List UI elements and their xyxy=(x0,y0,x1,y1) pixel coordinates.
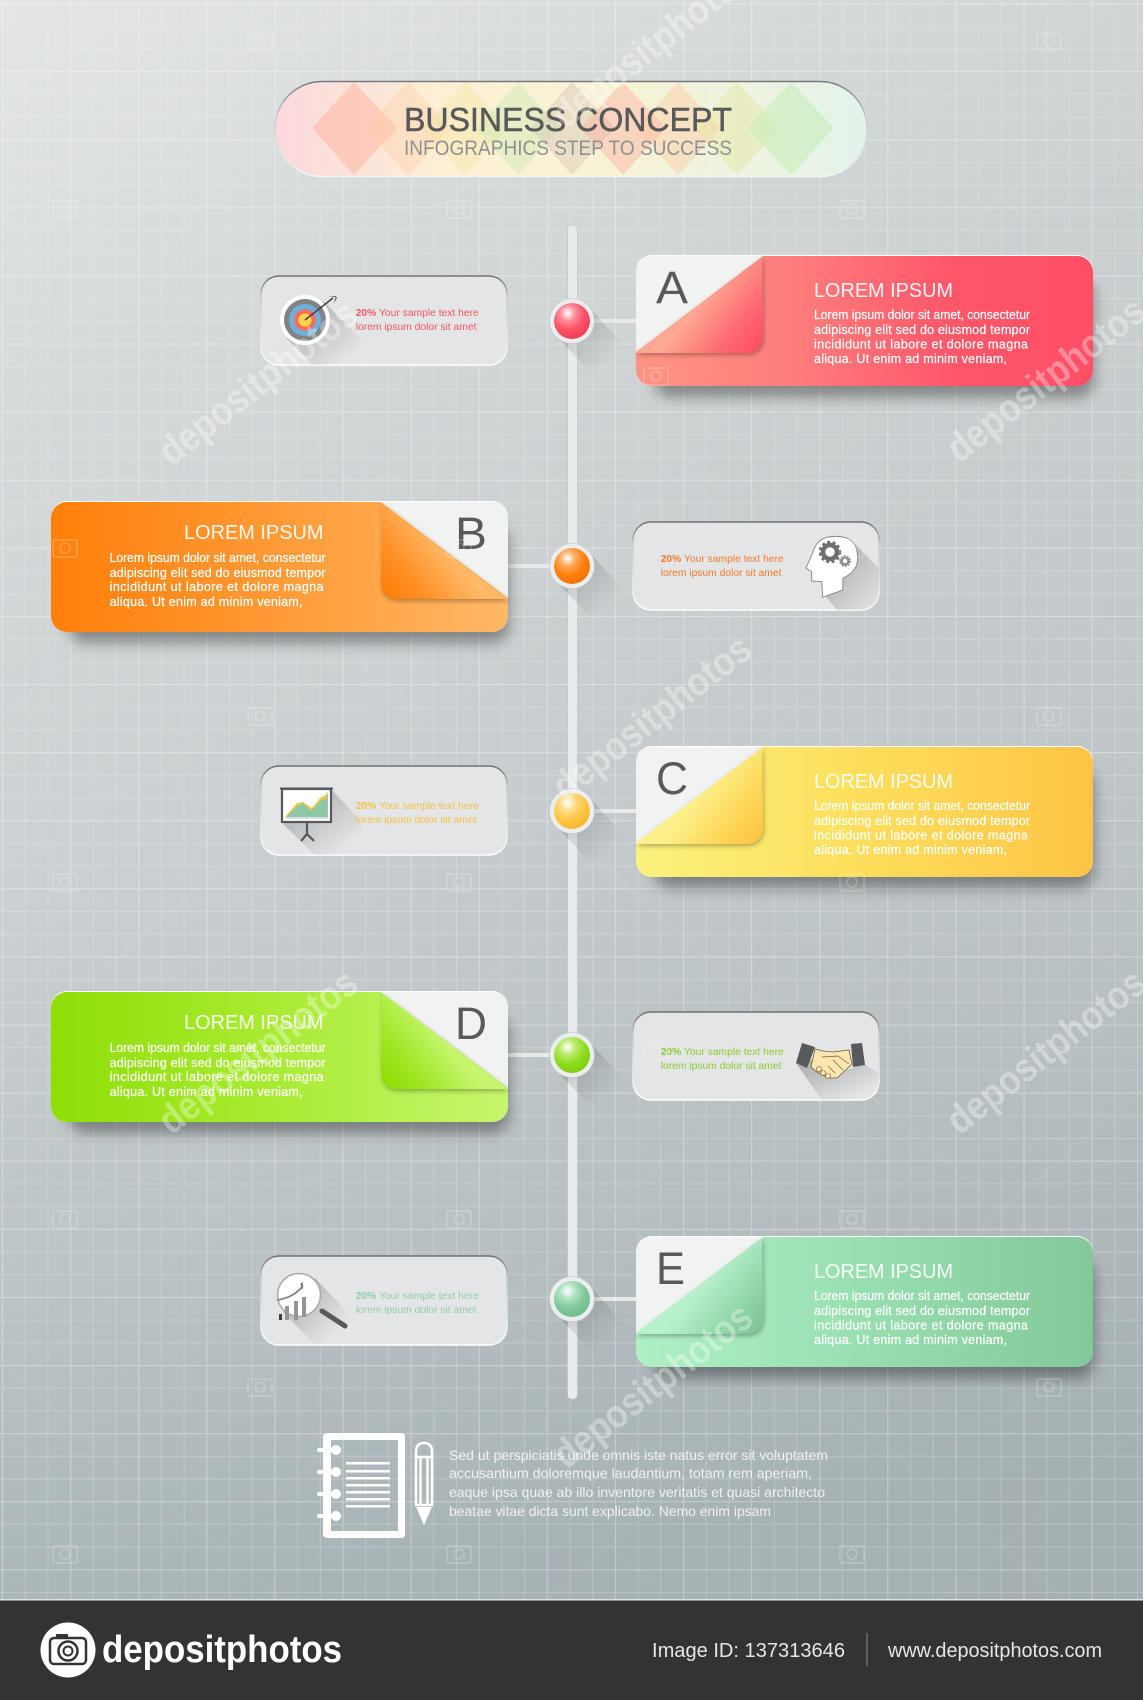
node D with connector xyxy=(507,1032,624,1108)
card body text xyxy=(110,1041,326,1099)
icon: magnifier with chart xyxy=(276,1272,348,1342)
footer note text: eaque ipsa quae ab illo inventore veritatis et quasi architecto xyxy=(449,1484,825,1500)
card heading: LOREM IPSUM xyxy=(184,522,324,544)
small box B: head: lorem ipsum dolor sit amet xyxy=(661,568,782,579)
icon: pencil xyxy=(416,1443,432,1525)
small box A: target xyxy=(261,276,507,372)
icon: handshake xyxy=(796,1043,879,1100)
card body text xyxy=(814,1289,1030,1347)
card body text xyxy=(814,308,1030,366)
small box D: handshake: lorem ipsum dolor sit amet xyxy=(661,1061,782,1072)
brand name: depositphotos xyxy=(102,1629,342,1671)
card body text xyxy=(814,799,1030,857)
card body text: adipiscing elit sed do eiusmod tempor xyxy=(110,566,326,580)
node B with connector xyxy=(507,544,624,619)
panel: card E xyxy=(636,1236,1094,1378)
card body text: adipiscing elit sed do eiusmod tempor xyxy=(814,323,1030,337)
title text: BUSINESS CONCEPT xyxy=(404,101,732,138)
small box E: magnifier xyxy=(261,1256,507,1350)
card body text: aliqua. Ut enim ad minim veniam, xyxy=(110,1085,303,1099)
watermarks: depositphotos xyxy=(150,292,366,474)
panel: card C xyxy=(636,746,1094,888)
watermarks: depositphotos xyxy=(544,627,760,809)
small box A: target: lorem ipsum dolor sit amet xyxy=(356,322,477,333)
letter C: C xyxy=(656,753,688,804)
icon: notebook xyxy=(317,1433,405,1538)
letter B: B xyxy=(455,508,487,559)
footer note text: Sed ut perspiciatis unde omnis iste natus error sit voluptatem xyxy=(449,1447,828,1463)
card body text: Lorem ipsum dolor sit amet, consectetur xyxy=(814,799,1030,813)
title banner xyxy=(275,82,867,176)
letter D: D xyxy=(455,998,487,1049)
panel: card A xyxy=(636,255,1094,397)
node C with connector xyxy=(550,788,636,864)
node E with connector xyxy=(550,1276,636,1352)
footer note text xyxy=(449,1447,828,1519)
card heading: LOREM IPSUM xyxy=(184,1012,324,1034)
card heading: LOREM IPSUM xyxy=(814,771,953,793)
caption text: 20% Your sample text here xyxy=(661,554,784,565)
small box E: magnifier: lorem ipsum dolor sit amet xyxy=(356,1305,477,1316)
card body text: aliqua. Ut enim ad minim veniam, xyxy=(814,1333,1007,1347)
card body text: incididunt ut labore et dolore magna xyxy=(814,828,1028,842)
footer note text: beatae vitae dicta sunt explicabo. Nemo enim ipsam xyxy=(449,1503,771,1519)
card body text: Lorem ipsum dolor sit amet, consectetur xyxy=(110,1041,326,1055)
icon: target with arrow xyxy=(280,295,358,365)
caption text: 20% Your sample text here xyxy=(356,308,479,319)
card body text: incididunt ut labore et dolore magna xyxy=(110,1070,324,1084)
letter A: A xyxy=(656,262,688,313)
card body text: incididunt ut labore et dolore magna xyxy=(110,580,324,594)
card body text: Lorem ipsum dolor sit amet, consectetur xyxy=(814,308,1030,322)
card body text: Lorem ipsum dolor sit amet, consectetur xyxy=(814,1289,1030,1303)
card body text: incididunt ut labore et dolore magna xyxy=(814,1318,1028,1332)
node A with connector xyxy=(550,298,636,374)
small box B: head xyxy=(632,521,880,611)
website url: www.depositphotos.com xyxy=(887,1640,1102,1662)
icon: presentation board xyxy=(280,788,360,855)
panel: card D xyxy=(51,991,509,1133)
card body text: adipiscing elit sed do eiusmod tempor xyxy=(814,1304,1030,1318)
card body text: aliqua. Ut enim ad minim veniam, xyxy=(110,595,303,609)
small box C: presentation xyxy=(261,766,507,860)
subtitle text: INFOGRAPHICS STEP TO SUCCESS xyxy=(404,137,732,160)
card body text: Lorem ipsum dolor sit amet, consectetur xyxy=(110,551,326,565)
card heading: LOREM IPSUM xyxy=(814,280,953,302)
caption text: 20% Your sample text here xyxy=(356,1291,479,1302)
image id: Image ID: 137313646 xyxy=(652,1640,845,1662)
icon: head with gears xyxy=(806,536,879,610)
caption text: 20% Your sample text here xyxy=(661,1047,784,1058)
panel: card B xyxy=(51,501,509,643)
watermarks xyxy=(150,0,1143,1477)
watermarks: depositphotos xyxy=(150,961,366,1143)
card body text: adipiscing elit sed do eiusmod tempor xyxy=(814,814,1030,828)
small box D: handshake xyxy=(633,1012,895,1100)
card body text: adipiscing elit sed do eiusmod tempor xyxy=(110,1056,326,1070)
letter E: E xyxy=(656,1243,685,1294)
card body text: aliqua. Ut enim ad minim veniam, xyxy=(814,352,1007,366)
card body text: incididunt ut labore et dolore magna xyxy=(814,338,1028,352)
caption text: 20% Your sample text here xyxy=(356,801,479,812)
card heading: LOREM IPSUM xyxy=(814,1261,953,1283)
footer bar xyxy=(0,1599,1143,1700)
footer note text: accusantium doloremque laudantium, totam rem aperiam, xyxy=(449,1465,812,1481)
watermark camera icons xyxy=(53,33,1061,1563)
card body text: aliqua. Ut enim ad minim veniam, xyxy=(814,843,1007,857)
icon: depositphotos logo xyxy=(40,1622,96,1678)
watermarks: depositphotos xyxy=(545,1295,761,1477)
card body text xyxy=(110,551,326,609)
timeline spine xyxy=(568,225,578,1399)
small box C: presentation: lorem ipsum dolor sit amet xyxy=(356,815,477,826)
